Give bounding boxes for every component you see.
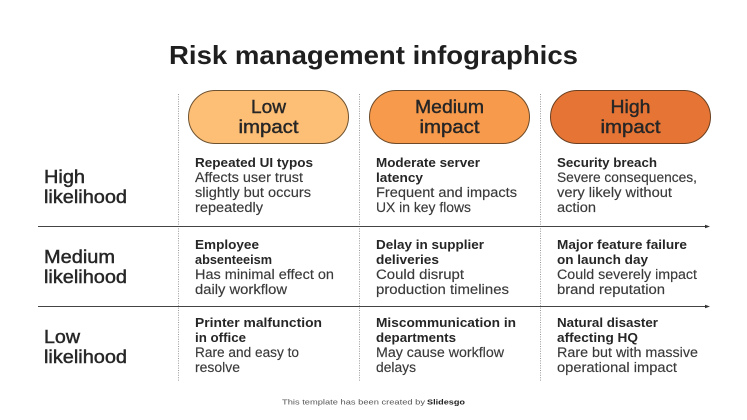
cell: employee absenteeism: Employee — [195, 237, 259, 252]
cell: delay in supplier deliveries: production timelines — [376, 282, 509, 297]
footer credit — [282, 398, 465, 406]
cell: moderate server latency: latency — [376, 170, 424, 185]
row label: high likelihood — [44, 167, 127, 207]
column header: high impact — [550, 90, 710, 144]
cell: major feature failure: Major feature failure — [557, 237, 687, 252]
row label: low likelihood: Low — [44, 327, 81, 347]
row label: low likelihood — [44, 327, 127, 367]
title: Risk management infographics — [169, 40, 578, 70]
cell: miscommunication in departments: May cause workflow — [376, 345, 504, 360]
cell: natural disaster: Rare but with massive — [557, 345, 698, 360]
cell: moderate server latency: Frequent and impacts — [376, 185, 517, 200]
cell: moderate server latency: UX in key flows — [376, 200, 471, 215]
cell: delay in supplier deliveries: deliveries — [376, 252, 439, 267]
cell: major feature failure — [557, 237, 697, 297]
row label: medium likelihood: likelihood — [44, 267, 127, 287]
cell: printer malfunction: Rare and easy to — [195, 345, 299, 360]
cell: printer malfunction: in office — [195, 330, 246, 345]
cell: printer malfunction — [195, 315, 322, 375]
cell: security breach: action — [557, 200, 596, 215]
column header: medium impact: impact — [420, 117, 480, 137]
cell: printer malfunction: Printer malfunction — [195, 315, 322, 330]
cell: repeated UI typos: repeatedly — [195, 200, 263, 215]
cell: printer malfunction: resolve — [195, 360, 240, 375]
cell: moderate server latency — [376, 155, 517, 215]
cell: repeated UI typos — [195, 155, 313, 215]
row label: low likelihood: likelihood — [44, 347, 127, 367]
cell: delay in supplier deliveries: Delay in supplier — [376, 237, 484, 252]
column header: medium impact — [370, 90, 530, 144]
row label: medium likelihood: Medium — [44, 247, 115, 267]
cell: miscommunication in departments — [376, 315, 516, 375]
cell: miscommunication in departments: departments — [376, 330, 456, 345]
cell: repeated UI typos: Affects user trust — [195, 170, 303, 185]
cell: major feature failure: brand reputation — [557, 282, 665, 297]
column header: low impact: Low — [251, 97, 287, 117]
cell: natural disaster: operational impact — [557, 360, 677, 375]
cell: natural disaster: Natural disaster — [557, 315, 658, 330]
cell: natural disaster — [557, 315, 698, 375]
cell: major feature failure: Could severely impact — [557, 267, 697, 282]
footer credit: Slidesgo — [427, 398, 465, 406]
column header: high impact: High — [610, 97, 650, 117]
footer credit: This template has been created by — [282, 398, 425, 406]
cell: security breach — [557, 155, 697, 215]
cell: natural disaster: affecting HQ — [557, 330, 638, 345]
column header: low impact: impact — [238, 117, 298, 137]
cell: major feature failure: on launch day — [557, 252, 649, 267]
cell: security breach: Severe consequences, — [557, 170, 697, 185]
cell: delay in supplier deliveries: Could disrupt — [376, 267, 464, 282]
column header: low impact — [188, 90, 348, 144]
cell: delay in supplier deliveries — [376, 237, 509, 297]
cell: moderate server latency: Moderate server — [376, 155, 480, 170]
column header: medium impact: Medium — [415, 97, 484, 117]
cell: employee absenteeism: absenteeism — [195, 252, 272, 267]
row divider arrow: medium to low — [38, 305, 710, 308]
column header: high impact: impact — [600, 117, 660, 137]
cell: employee absenteeism — [195, 237, 334, 297]
cell: miscommunication in departments: Miscommunication in — [376, 315, 516, 330]
cell: repeated UI typos: slightly but occurs — [195, 185, 311, 200]
row label: high likelihood: likelihood — [44, 187, 127, 207]
cell: miscommunication in departments: delays — [376, 360, 416, 375]
cell: employee absenteeism: Has minimal effect on — [195, 267, 334, 282]
row divider arrow: high to medium — [38, 225, 710, 228]
row label: high likelihood: High — [44, 167, 85, 187]
row label: medium likelihood — [44, 247, 127, 287]
cell: security breach: Security breach — [557, 155, 657, 170]
cell: repeated UI typos: Repeated UI typos — [195, 155, 313, 170]
column separators — [178, 94, 540, 382]
cell: employee absenteeism: daily workflow — [195, 282, 287, 297]
cell: security breach: very likely without — [557, 185, 672, 200]
